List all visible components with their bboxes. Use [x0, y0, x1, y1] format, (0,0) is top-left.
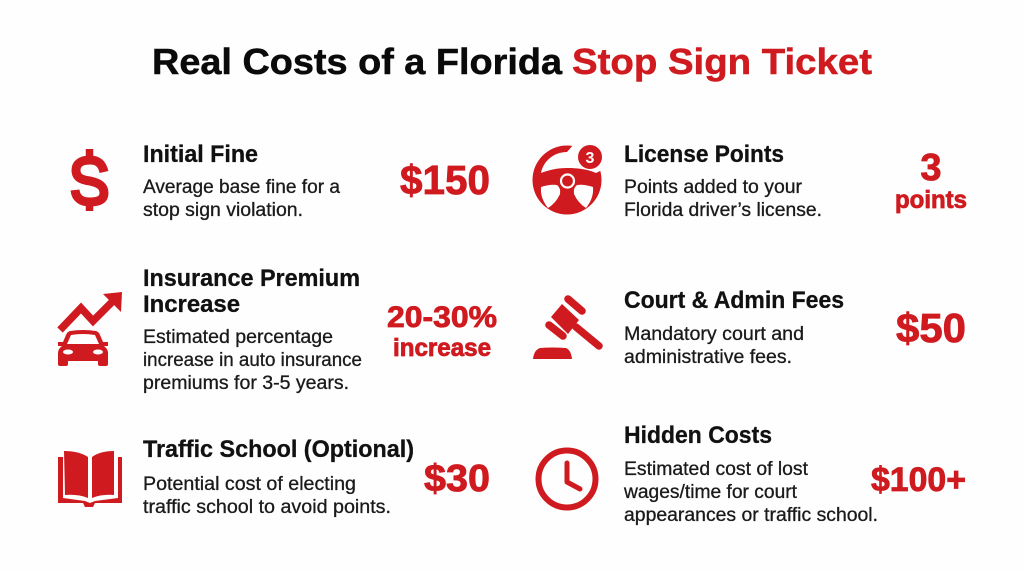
heading: insurance premium increase: Increase — [143, 291, 240, 318]
panel: license points — [532, 141, 967, 221]
description: insurance premium increase: premiums for 3-5 years. — [143, 373, 349, 394]
heading: initial fine: Initial Fine — [143, 141, 258, 168]
description: traffic school — [143, 474, 391, 518]
heading: hidden costs: Hidden Costs — [624, 422, 772, 449]
description: insurance premium increase: Estimated percentage — [143, 327, 333, 348]
description: license points: Points added to your — [624, 177, 803, 198]
icon: rising arrow and car — [58, 292, 122, 366]
value: 20-30% increase: increase — [393, 334, 491, 362]
heading: insurance premium increase: Insurance Premium — [143, 265, 360, 292]
value: $100+: $100+ — [871, 461, 966, 499]
title: Stop Sign Ticket — [572, 41, 872, 82]
description: license points: Florida driver’s license. — [624, 200, 822, 221]
icon: dollar sign — [75, 149, 104, 211]
description: traffic school: Potential cost of electing — [143, 474, 356, 495]
value: $30: $30 — [424, 458, 490, 500]
icon: gavel — [533, 299, 599, 359]
icon: open book — [58, 451, 122, 507]
description: hidden costs: appearances or traffic school. — [624, 505, 878, 526]
value: 20-30% increase: 20-30% — [387, 301, 497, 334]
panel: hidden costs — [538, 422, 966, 526]
title — [152, 41, 872, 82]
icon: steering wheel with badge — [532, 144, 606, 214]
value: $150: $150 — [400, 157, 490, 203]
description: initial fine — [143, 177, 340, 221]
value: $50: $50 — [896, 305, 966, 351]
value: 3 points: points — [895, 186, 967, 214]
description: insurance premium increase — [143, 327, 362, 394]
panel: court and admin fees — [533, 287, 966, 368]
heading: traffic school: Traffic School (Optional) — [143, 436, 414, 463]
description: court and admin fees: Mandatory court and — [624, 324, 804, 345]
value: 20-30% increase — [387, 301, 497, 362]
description: court and admin fees: administrative fees. — [624, 347, 792, 368]
icon: steering wheel with badge: 3 — [586, 150, 595, 167]
icon: clock — [538, 450, 596, 508]
description: initial fine: stop sign violation. — [143, 200, 303, 221]
description: license points — [624, 177, 822, 221]
title: Real Costs of a Florida — [152, 41, 563, 82]
heading: court and admin fees: Court & Admin Fees — [624, 287, 844, 314]
panel: traffic school — [58, 436, 490, 518]
description: court and admin fees — [624, 324, 804, 368]
description: initial fine: Average base fine for a — [143, 177, 340, 198]
panel: insurance premium increase — [58, 265, 497, 394]
description: hidden costs: Estimated cost of lost — [624, 459, 809, 480]
value: 3 points: 3 — [920, 147, 942, 189]
heading: license points: License Points — [624, 141, 784, 168]
heading: insurance premium increase — [143, 265, 360, 318]
description: hidden costs: wages/time for court — [623, 482, 798, 503]
description: traffic school: traffic school to avoid points. — [143, 497, 391, 518]
value: 3 points — [895, 147, 967, 214]
description: hidden costs — [623, 459, 878, 526]
panel: initial fine — [75, 141, 490, 221]
description: insurance premium increase: increase in auto insurance — [143, 350, 362, 371]
